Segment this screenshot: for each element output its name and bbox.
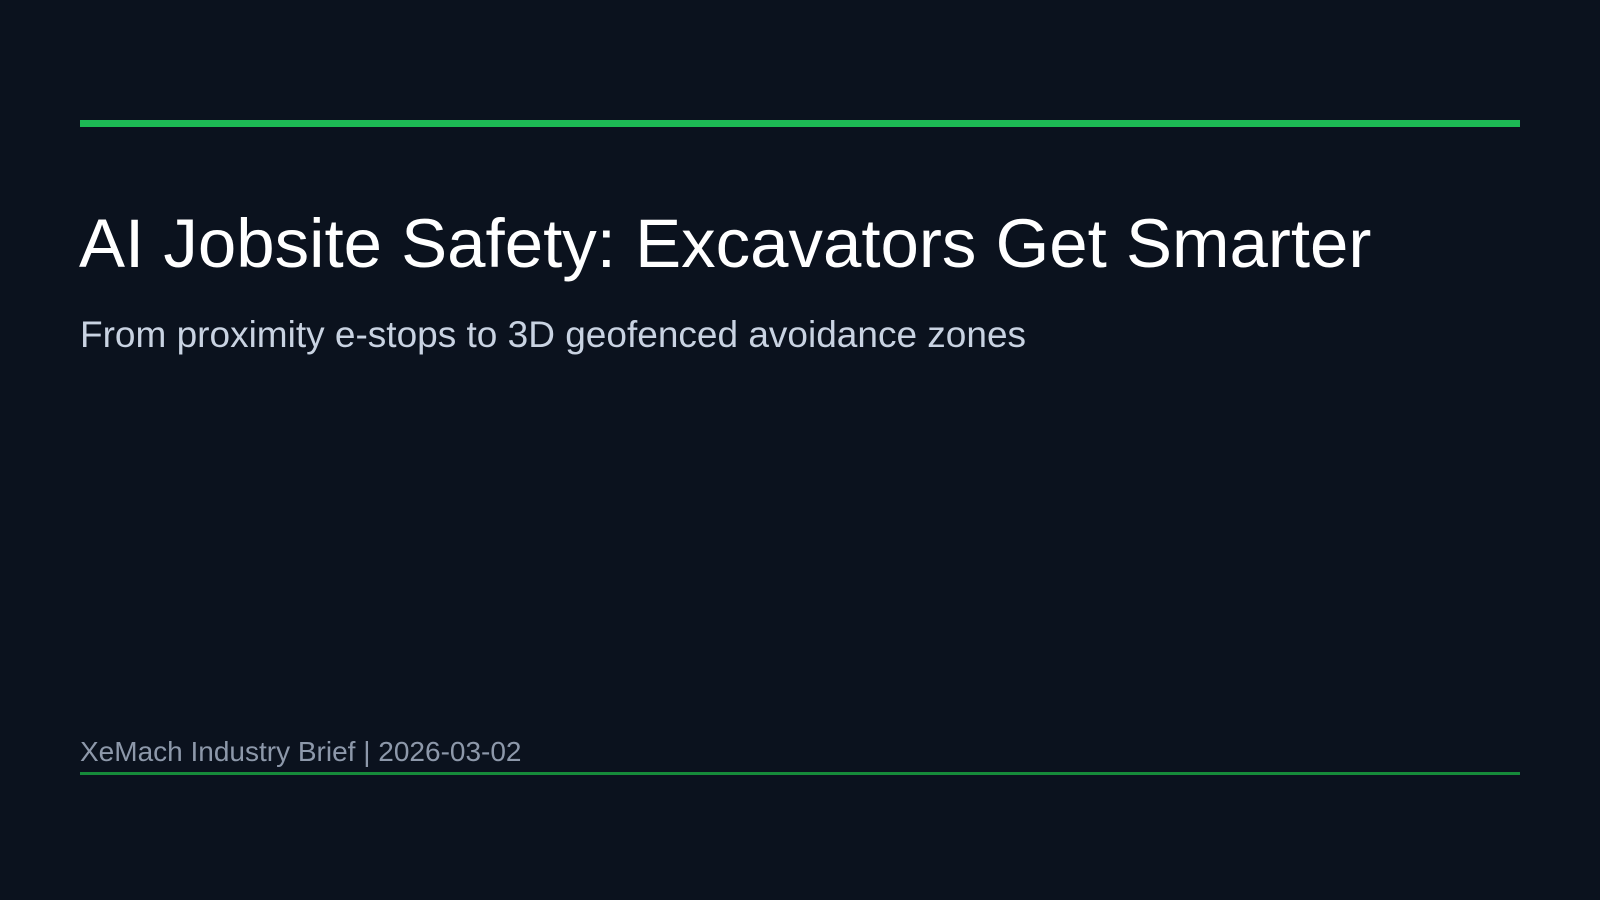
top accent bar xyxy=(80,120,1520,127)
subtitle: From proximity e-stops to 3D geofenced avoidance zones xyxy=(80,314,1026,355)
title: AI Jobsite Safety: Excavators Get Smarter xyxy=(79,205,1371,282)
footer source and date: XeMach Industry Brief | 2026-03-02 xyxy=(80,736,522,767)
bottom accent line xyxy=(80,772,1520,775)
